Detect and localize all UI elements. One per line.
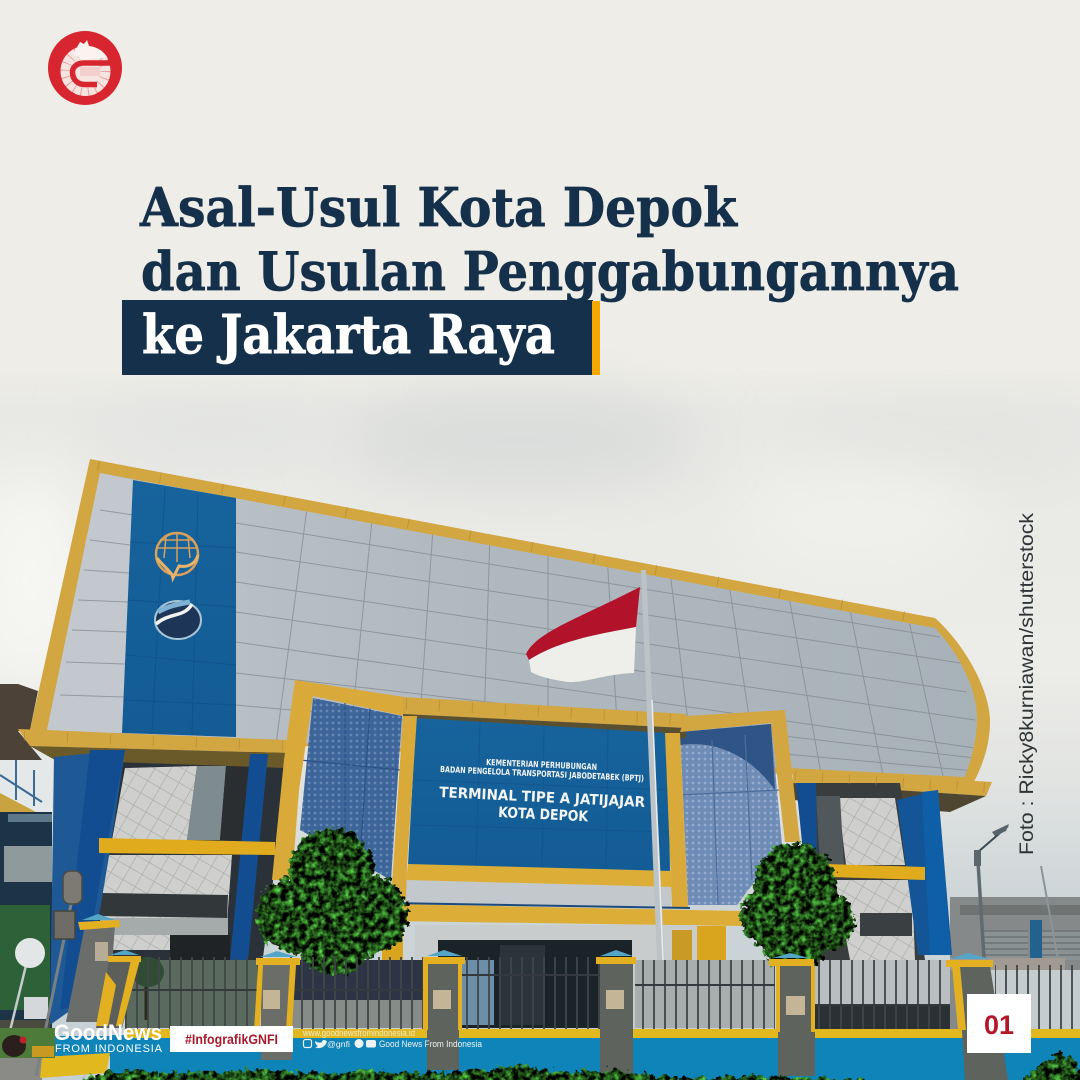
footer: hashtag box <box>170 1026 293 1052</box>
building: terminal <box>18 459 992 1030</box>
title line 1: Asal-Usul Kota Depok <box>139 177 738 239</box>
logo: GNFI red badge <box>48 31 122 105</box>
photo credit: Foto : Ricky8kurniawan/shutterstock <box>1017 512 1038 855</box>
icon: twitter <box>315 1040 327 1048</box>
pillar 4 <box>423 950 465 1070</box>
icon: facebook <box>354 1039 364 1048</box>
right roof band <box>793 770 992 812</box>
right wing gold frame <box>680 710 800 842</box>
footer: website and social handles: @gnfi <box>327 1039 350 1049</box>
icon: instagram <box>304 1040 312 1048</box>
right neighbouring building and street lamp <box>950 824 1080 1030</box>
title highlight bar <box>122 300 600 375</box>
footer: GoodNews logo: FROM INDONESIA <box>55 1043 163 1055</box>
icon: ministry globe emblem <box>156 533 198 578</box>
pillar 1 <box>66 914 120 1022</box>
gold pillars and bars around sign <box>389 716 742 926</box>
footer: GoodNews logo <box>54 1020 163 1055</box>
blue sign board with lettering <box>408 718 670 872</box>
bonsai shrub <box>132 957 164 1020</box>
sign text: agency: BADAN PENGELOLA TRANSPORTASI JABODETABEK (BPTJ) <box>440 764 644 783</box>
grey strip below sign <box>402 880 671 907</box>
icon: youtube <box>366 1040 376 1048</box>
sign text: terminal name: TERMINAL TIPE A JATIJAJAR <box>439 785 645 811</box>
blue base wall with gold coping <box>55 1029 1080 1080</box>
pillar 7 <box>946 953 1008 1080</box>
pillar 3 <box>254 951 300 1060</box>
left walkway and roof <box>0 684 52 1080</box>
sign text: ministry: KEMENTERIAN PERHUBUNGAN <box>486 757 597 772</box>
left wing gold frame <box>272 680 404 880</box>
entrance <box>380 925 726 1030</box>
road sign pole and signs <box>9 871 82 1076</box>
gold edge segment joints <box>24 466 988 788</box>
tree left <box>257 828 408 975</box>
icon: BPTJ emblem <box>155 601 201 639</box>
fence backdrop <box>125 960 950 1029</box>
patterned glass wings <box>300 698 782 905</box>
centre gold header <box>403 697 686 738</box>
upper facade panel <box>30 459 990 790</box>
fence railing <box>125 957 1080 1033</box>
pillar 5 <box>596 950 636 1074</box>
yellow curb and roadside <box>0 1028 110 1078</box>
yellow ledges <box>99 838 925 880</box>
tree right <box>740 843 855 972</box>
pillar 6 <box>769 953 815 1076</box>
page number box: 01 <box>984 1010 1014 1040</box>
pillar 2 <box>96 950 141 1028</box>
page number box <box>967 994 1031 1053</box>
ground floor walls <box>70 752 925 965</box>
footer: website and social handles <box>302 1028 482 1049</box>
title line 3: ke Jakarta Raya <box>142 304 555 366</box>
footer: hashtag box: #InfografikGNFI <box>185 1031 278 1047</box>
title line 2: dan Usulan Penggabungannya <box>141 241 959 303</box>
left roof band <box>18 729 287 768</box>
Indonesian flag <box>526 587 640 682</box>
sign text: city: KOTA DEPOK <box>498 805 589 825</box>
title <box>139 177 959 303</box>
footer: website and social handles: Good News From Indonesia <box>379 1039 482 1049</box>
gate pillars <box>66 914 1008 1080</box>
bushes along the wall <box>80 1052 1080 1080</box>
blue columns <box>50 750 952 1025</box>
flag pole <box>641 570 668 1032</box>
footer: GoodNews logo: GoodNews <box>54 1020 162 1045</box>
footer: website and social handles: www.goodnewsfromindonesia.id <box>302 1028 415 1038</box>
